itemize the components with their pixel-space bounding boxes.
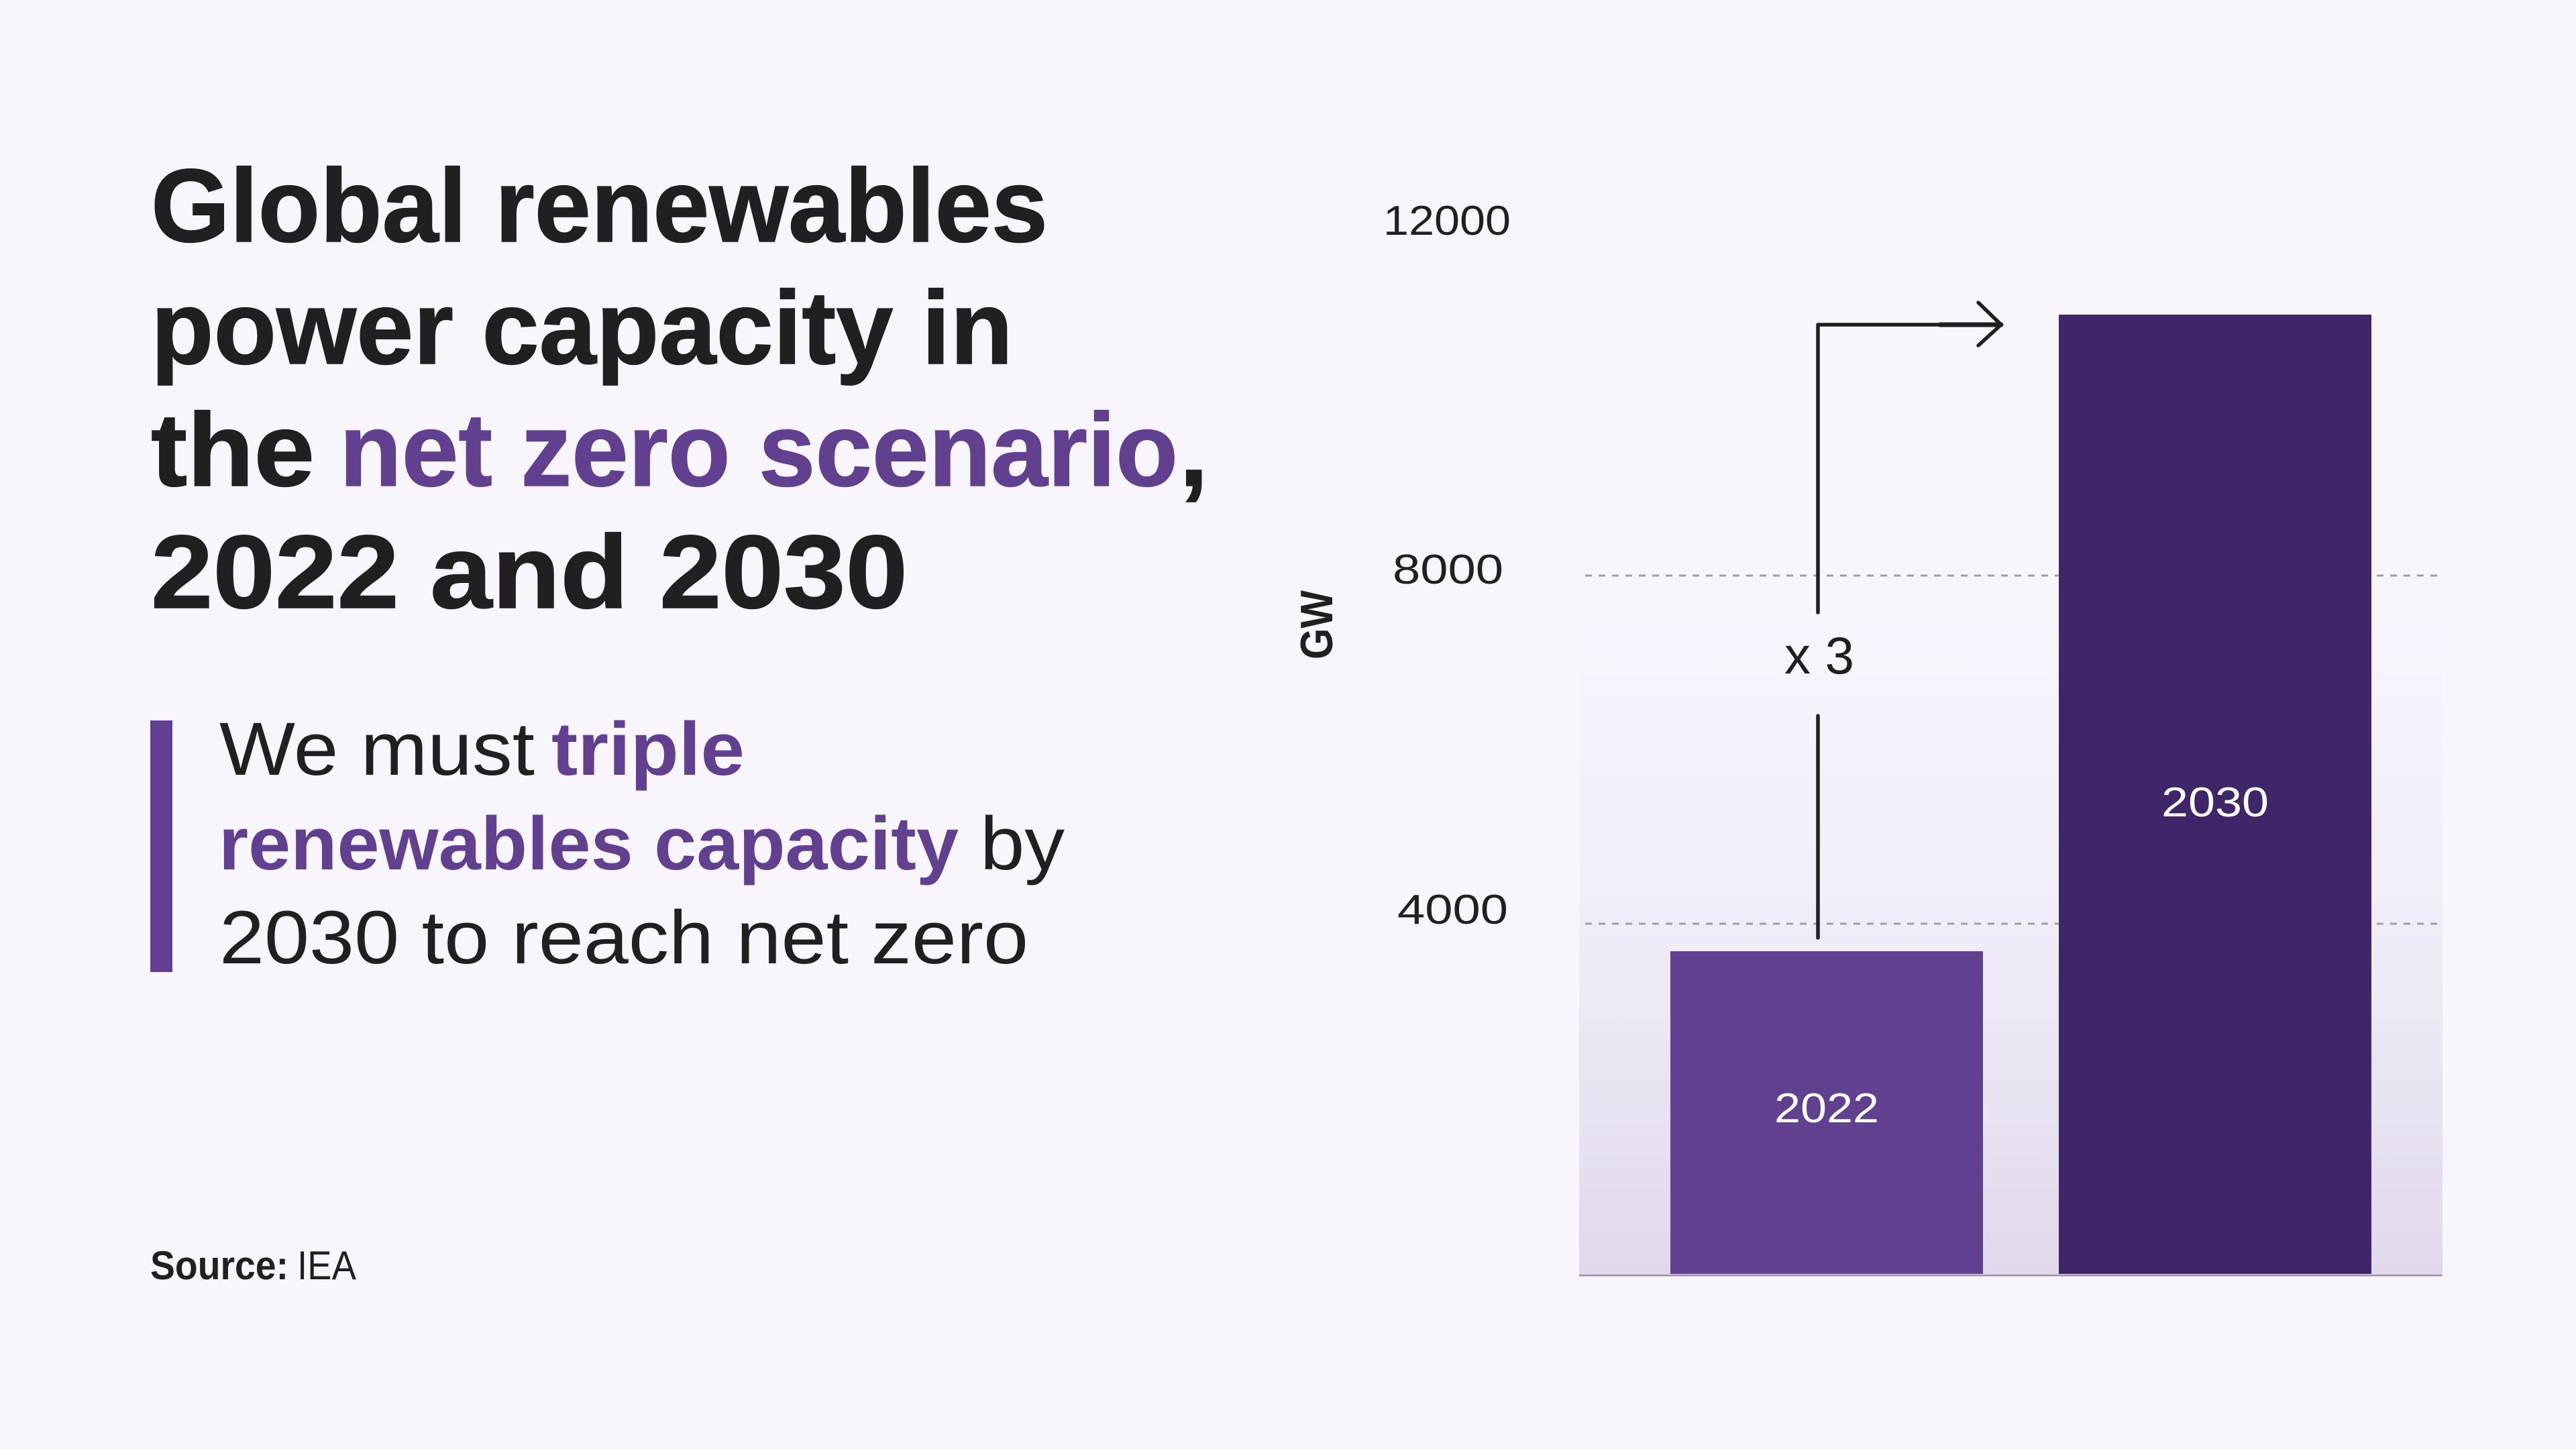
bar chart [1291,198,2443,1276]
gridlines [1585,576,2437,924]
callout: triple renewables capacity [150,707,1065,979]
arrow: times three growth [1818,303,2001,938]
bar 2030: 2030 [2161,780,2269,826]
source note: Source: [150,1243,288,1288]
title: , [1179,392,1208,508]
title: power capacity in [151,270,1013,386]
callout accent bar [150,720,172,972]
callout text: 2030 to reach net zero [219,896,1028,979]
source note: IEA [297,1243,356,1288]
bar 2022: 2022 [1774,1085,1879,1132]
y axis tick labels [1383,198,1511,933]
y axis baseline [1579,1275,2443,1276]
callout text [219,707,1065,979]
callout text: renewables capacity [219,802,959,885]
y axis tick labels: 4000 [1397,887,1508,933]
bar 2022 [1670,951,1983,1274]
chart background gradient [1579,621,2443,1275]
title: the [151,392,315,508]
multiplier label: x 3 [1784,626,1854,685]
title: 2022 and 2030 [151,514,908,630]
title: net zero scenario [339,392,1178,508]
title [151,148,1208,630]
callout text: by [980,802,1065,885]
title: Global renewables [151,148,1048,264]
bar 2030 [2059,315,2371,1274]
y axis tick labels: 8000 [1393,547,1503,593]
callout text: We must [219,707,535,791]
y axis tick labels: 12000 [1383,198,1511,244]
callout text: triple [551,707,745,791]
y axis title: GW [1291,590,1342,659]
